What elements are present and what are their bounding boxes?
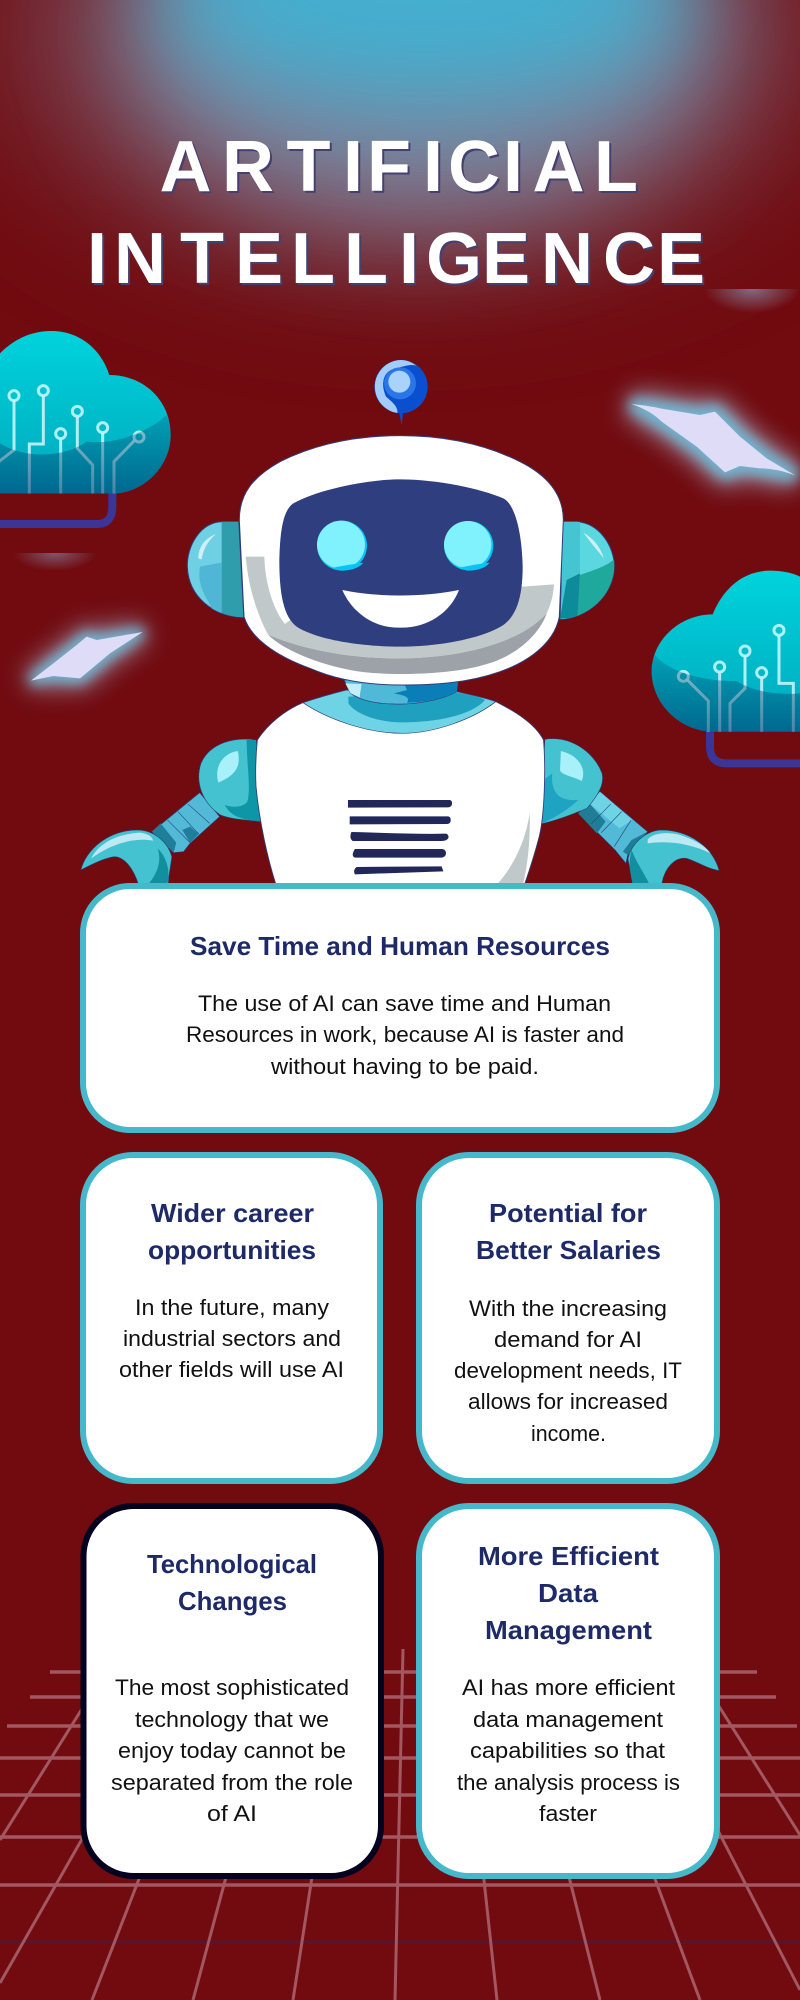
heading [148,1198,316,1265]
body text: other fields will use AI [119,1357,344,1382]
card: Technological Changes [84,1506,381,1876]
heading: Technological [147,1549,317,1579]
perspective floor grid [0,1649,800,2000]
left eye [317,521,367,571]
body text: of AI [207,1801,257,1826]
body text: without having to be paid. [270,1054,539,1079]
torso shade [498,813,530,883]
body text: The most sophisticated [115,1675,349,1700]
body text: income. [531,1421,606,1446]
heading: Data [538,1578,599,1608]
body text: separated from the role [111,1770,353,1795]
body text [119,1295,344,1382]
smile [342,590,459,628]
title: ARTIFICIAL [160,127,638,207]
robot head [187,360,615,685]
left shoulder [199,739,262,822]
body text: capabilities so that [470,1738,665,1763]
body text [186,991,624,1079]
heading [478,1541,659,1645]
body text: enjoy today cannot be [118,1738,346,1763]
heading [476,1198,661,1265]
body text: technology that we [135,1707,329,1732]
body text [111,1675,353,1826]
right claw arm [578,792,719,883]
cloud: right with circuits [652,571,800,763]
antenna bulb [374,360,428,425]
neck [344,680,458,704]
heading: opportunities [148,1235,316,1265]
card: Wider career opportunities [83,1155,380,1481]
right eye [444,521,493,571]
background glow spots [13,265,800,571]
right ear [560,520,615,620]
helmet [239,436,563,685]
shard: upper right glowing [632,404,796,476]
body text: faster [539,1801,597,1826]
background glow: top sky [0,0,800,260]
card: More Efficient Data Management [419,1506,717,1876]
body text: AI has more efficient [462,1675,675,1700]
body text: In the future, many [135,1295,329,1320]
body text: With the increasing [469,1296,667,1321]
heading: Changes [178,1586,287,1616]
cloud: left with circuits [0,331,171,524]
body text: The use of AI can save time and Human [198,991,611,1016]
helmet shade [246,557,554,674]
body text [454,1296,682,1446]
card: Potential for Better Salaries [419,1155,717,1481]
face screen [279,479,523,647]
left claw arm [81,793,220,883]
body text: development needs, IT [454,1358,682,1383]
heading: Wider career [151,1198,314,1228]
body text: the analysis process is [457,1770,680,1795]
title [87,127,705,299]
body text: industrial sectors and [123,1326,341,1351]
robot body with arms [81,680,719,883]
robot [81,360,719,883]
left ear [187,520,245,620]
shard: lower left glowing [31,632,143,681]
title: INTELLIGENCE [87,219,705,299]
torso [256,702,545,883]
right shoulder [541,739,603,824]
body text: allows for increased [468,1389,668,1414]
heading: Management [485,1615,652,1645]
body text: data management [473,1707,663,1732]
heading: More Efficient [478,1541,659,1571]
chest stripes [348,800,452,874]
heading: Better Salaries [476,1235,661,1265]
body text: Resources in work, because AI is faster and [186,1022,624,1047]
heading [147,1549,317,1616]
heading: Potential for [489,1198,647,1228]
body text: demand for AI [494,1327,642,1352]
collar [303,690,496,733]
body text [457,1675,680,1826]
card: Save Time and Human Resources [83,886,717,1130]
heading: Save Time and Human Resources [190,931,610,961]
